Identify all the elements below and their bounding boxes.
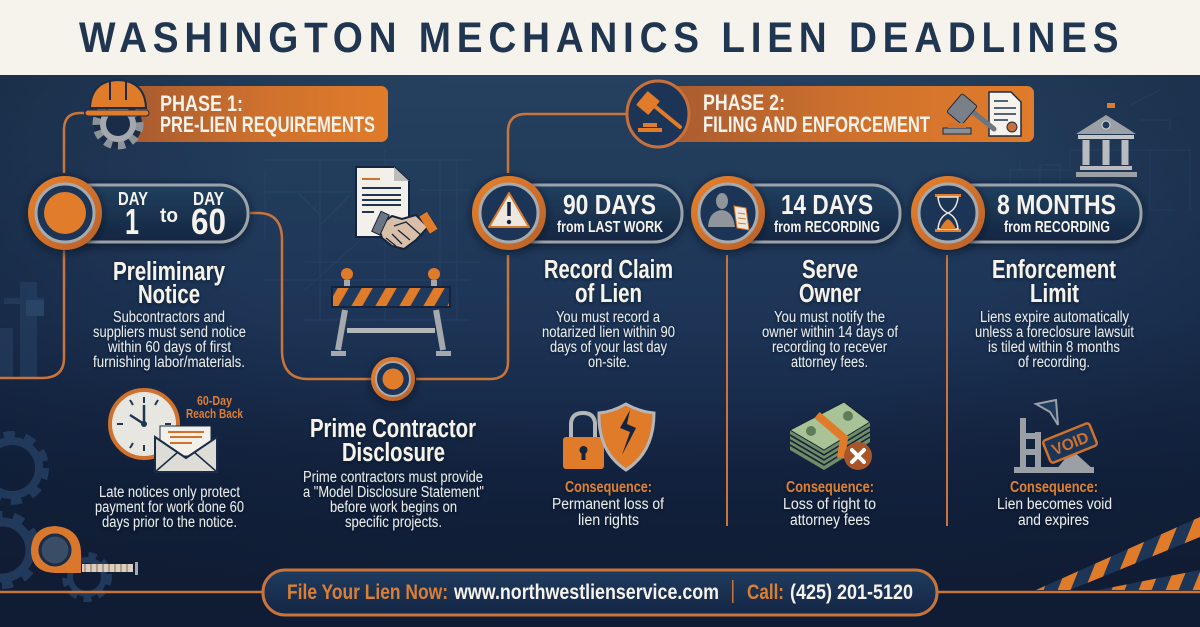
icon: gavel circle bbox=[627, 81, 689, 147]
text block: serve owner: You must notify the bbox=[774, 309, 885, 326]
text block: prime contractor disclosure: Prime Contractor bbox=[310, 415, 476, 443]
panel: phase 1 banner bbox=[85, 80, 388, 145]
text block: prime contractor disclosure: a "Model Disclosure Statement" bbox=[303, 484, 484, 501]
phase 2 heading: PHASE 2: bbox=[703, 90, 785, 115]
icon: document with handshake bbox=[356, 167, 438, 249]
text block: prime contractor disclosure: specific projects. bbox=[345, 514, 442, 531]
icon: hourglass bbox=[911, 176, 985, 250]
icon: small timeline node bbox=[371, 357, 415, 401]
text block: consequence 2: Consequence: bbox=[786, 479, 874, 496]
phase 1 heading: PHASE 1: bbox=[160, 91, 243, 116]
icon: warning triangle bbox=[472, 176, 546, 250]
text block: consequence 2 bbox=[783, 479, 876, 529]
text block: record claim of lien: days of your last day bbox=[550, 339, 667, 356]
panel: 90 days timeline node: 90 DAYS bbox=[563, 189, 656, 220]
icon: person with document bbox=[691, 176, 765, 250]
icon: bank building bbox=[1076, 103, 1137, 177]
text block: serve owner: Serve bbox=[802, 256, 858, 284]
day range text: to bbox=[160, 205, 178, 227]
text block: enforcement limit: Liens expire automatically bbox=[980, 309, 1129, 326]
text block: consequence 3 bbox=[997, 479, 1112, 529]
panel: footer call to action bbox=[263, 570, 937, 615]
text block: prime contractor disclosure: before work begins on bbox=[330, 499, 457, 516]
text block: consequence 2: Loss of right to bbox=[783, 496, 876, 513]
icon: tape measure bbox=[31, 526, 138, 575]
icon: gavel and certificate bbox=[943, 92, 1021, 136]
panel: 8 months timeline node: from RECORDING bbox=[1004, 219, 1110, 236]
panel: 14 days timeline node bbox=[691, 176, 900, 250]
panel: footer call to action: www.northwestlienservice.com bbox=[453, 581, 719, 604]
text block: record claim of lien bbox=[542, 256, 675, 371]
text block: preliminary notice: Preliminary bbox=[113, 258, 226, 286]
text block: preliminary notice: Notice bbox=[138, 281, 200, 309]
icon: clock with envelope bbox=[110, 390, 217, 472]
phase 2 heading bbox=[703, 90, 930, 137]
text block: prime contractor disclosure bbox=[303, 415, 484, 531]
text block: enforcement limit: unless a foreclosure lawsuit bbox=[975, 324, 1135, 341]
text block: consequence 3: Consequence: bbox=[1010, 479, 1098, 496]
icon: void building rubble bbox=[1014, 400, 1098, 470]
panel: 8 months timeline node: 8 MONTHS bbox=[997, 189, 1116, 220]
phase 1 heading bbox=[160, 91, 375, 137]
gears bottom left bbox=[0, 435, 109, 599]
text block: preliminary notice: within 60 days of first bbox=[107, 339, 232, 356]
day range text: 60 bbox=[191, 201, 226, 242]
text block: consequence 2: attorney fees bbox=[790, 512, 870, 529]
text block: late notices: payment for work done 60 bbox=[95, 499, 244, 516]
day range text: DAY bbox=[118, 189, 148, 209]
icon: money stack with x bbox=[790, 402, 872, 470]
text block: serve owner: owner within 14 days of bbox=[762, 324, 899, 341]
icon: orange node bbox=[28, 176, 102, 250]
text block: enforcement limit: of recording. bbox=[1018, 354, 1090, 371]
text block: preliminary notice: Subcontractors and bbox=[113, 309, 225, 326]
text block: enforcement limit bbox=[975, 256, 1135, 371]
title: WASHINGTON MECHANICS LIEN DEADLINES bbox=[79, 13, 1119, 61]
text block: record claim of lien: You must record a bbox=[556, 309, 660, 326]
icon: padlock and cracked shield bbox=[563, 404, 654, 470]
text block: enforcement limit: is tiled within 8 months bbox=[988, 339, 1120, 356]
text block: consequence 1: Consequence: bbox=[565, 479, 652, 496]
text block: record claim of lien: of Lien bbox=[575, 280, 642, 308]
callout: 60-day reach back: Reach Back bbox=[186, 407, 243, 421]
panel: day 1 to 60 timeline node bbox=[28, 176, 248, 250]
text block: record claim of lien: on-site. bbox=[588, 354, 630, 371]
panel: phase 2 banner bbox=[627, 81, 1034, 147]
caution tape bottom right bbox=[1036, 517, 1200, 590]
panel: footer call to action: Call: bbox=[747, 581, 784, 604]
panel: 14 days timeline node: 14 DAYS bbox=[781, 189, 873, 220]
panel: footer call to action: (425) 201-5120 bbox=[790, 581, 913, 604]
text block: prime contractor disclosure: Disclosure bbox=[342, 439, 445, 467]
text block: late notices: days prior to the notice. bbox=[102, 514, 237, 531]
text block: consequence 1: lien rights bbox=[578, 512, 639, 529]
panel: 14 days timeline node: from RECORDING bbox=[774, 219, 880, 236]
day range text: DAY bbox=[193, 189, 224, 209]
text block: consequence 3: Lien becomes void bbox=[997, 496, 1112, 513]
text block: preliminary notice: furnishing labor/materials. bbox=[93, 354, 245, 371]
text block: serve owner: Owner bbox=[799, 280, 861, 308]
text block: serve owner: attorney fees. bbox=[791, 354, 868, 371]
text block: late notices: Late notices only protect bbox=[99, 484, 241, 501]
text block: late notices bbox=[95, 484, 244, 531]
icon: hard hat and gear bbox=[85, 80, 149, 145]
title band bbox=[0, 0, 1200, 75]
panel: 90 days timeline node: from LAST WORK bbox=[557, 219, 664, 236]
day range text bbox=[118, 189, 226, 242]
text block: enforcement limit: Enforcement bbox=[992, 256, 1116, 284]
text block: consequence 1 bbox=[552, 479, 665, 529]
text block: serve owner: recording to recever bbox=[772, 339, 887, 356]
phase 2 heading: FILING AND ENFORCEMENT bbox=[703, 112, 930, 137]
icon: road barricade bbox=[331, 268, 451, 356]
phase 1 heading: PRE-LIEN REQUIREMENTS bbox=[160, 112, 375, 137]
icon: void building rubble: VOID bbox=[1050, 429, 1091, 459]
panel: 90 days timeline node bbox=[472, 176, 682, 250]
panel: 8 months timeline node bbox=[911, 176, 1141, 250]
callout: 60-day reach back bbox=[186, 394, 243, 421]
day range text: 1 bbox=[125, 201, 139, 242]
text block: serve owner bbox=[762, 256, 899, 371]
text block: enforcement limit: Limit bbox=[1030, 280, 1079, 308]
text block: preliminary notice: suppliers must send notice bbox=[93, 324, 246, 341]
text block: consequence 3: and expires bbox=[1018, 512, 1089, 529]
building silhouette left bbox=[0, 282, 44, 378]
timeline connector lines bbox=[0, 113, 1200, 592]
text block: record claim of lien: notarized lien within 90 bbox=[542, 324, 675, 341]
panel: footer call to action: File Your Lien Now: bbox=[287, 581, 448, 604]
text block: prime contractor disclosure: Prime contractors must provide bbox=[303, 469, 483, 486]
text block: record claim of lien: Record Claim bbox=[544, 256, 673, 284]
text block: preliminary notice bbox=[93, 258, 246, 371]
blueprint scaffold background bbox=[265, 90, 1190, 320]
text block: consequence 1: Permanent loss of bbox=[552, 496, 665, 513]
callout: 60-day reach back: 60-Day bbox=[197, 394, 232, 408]
